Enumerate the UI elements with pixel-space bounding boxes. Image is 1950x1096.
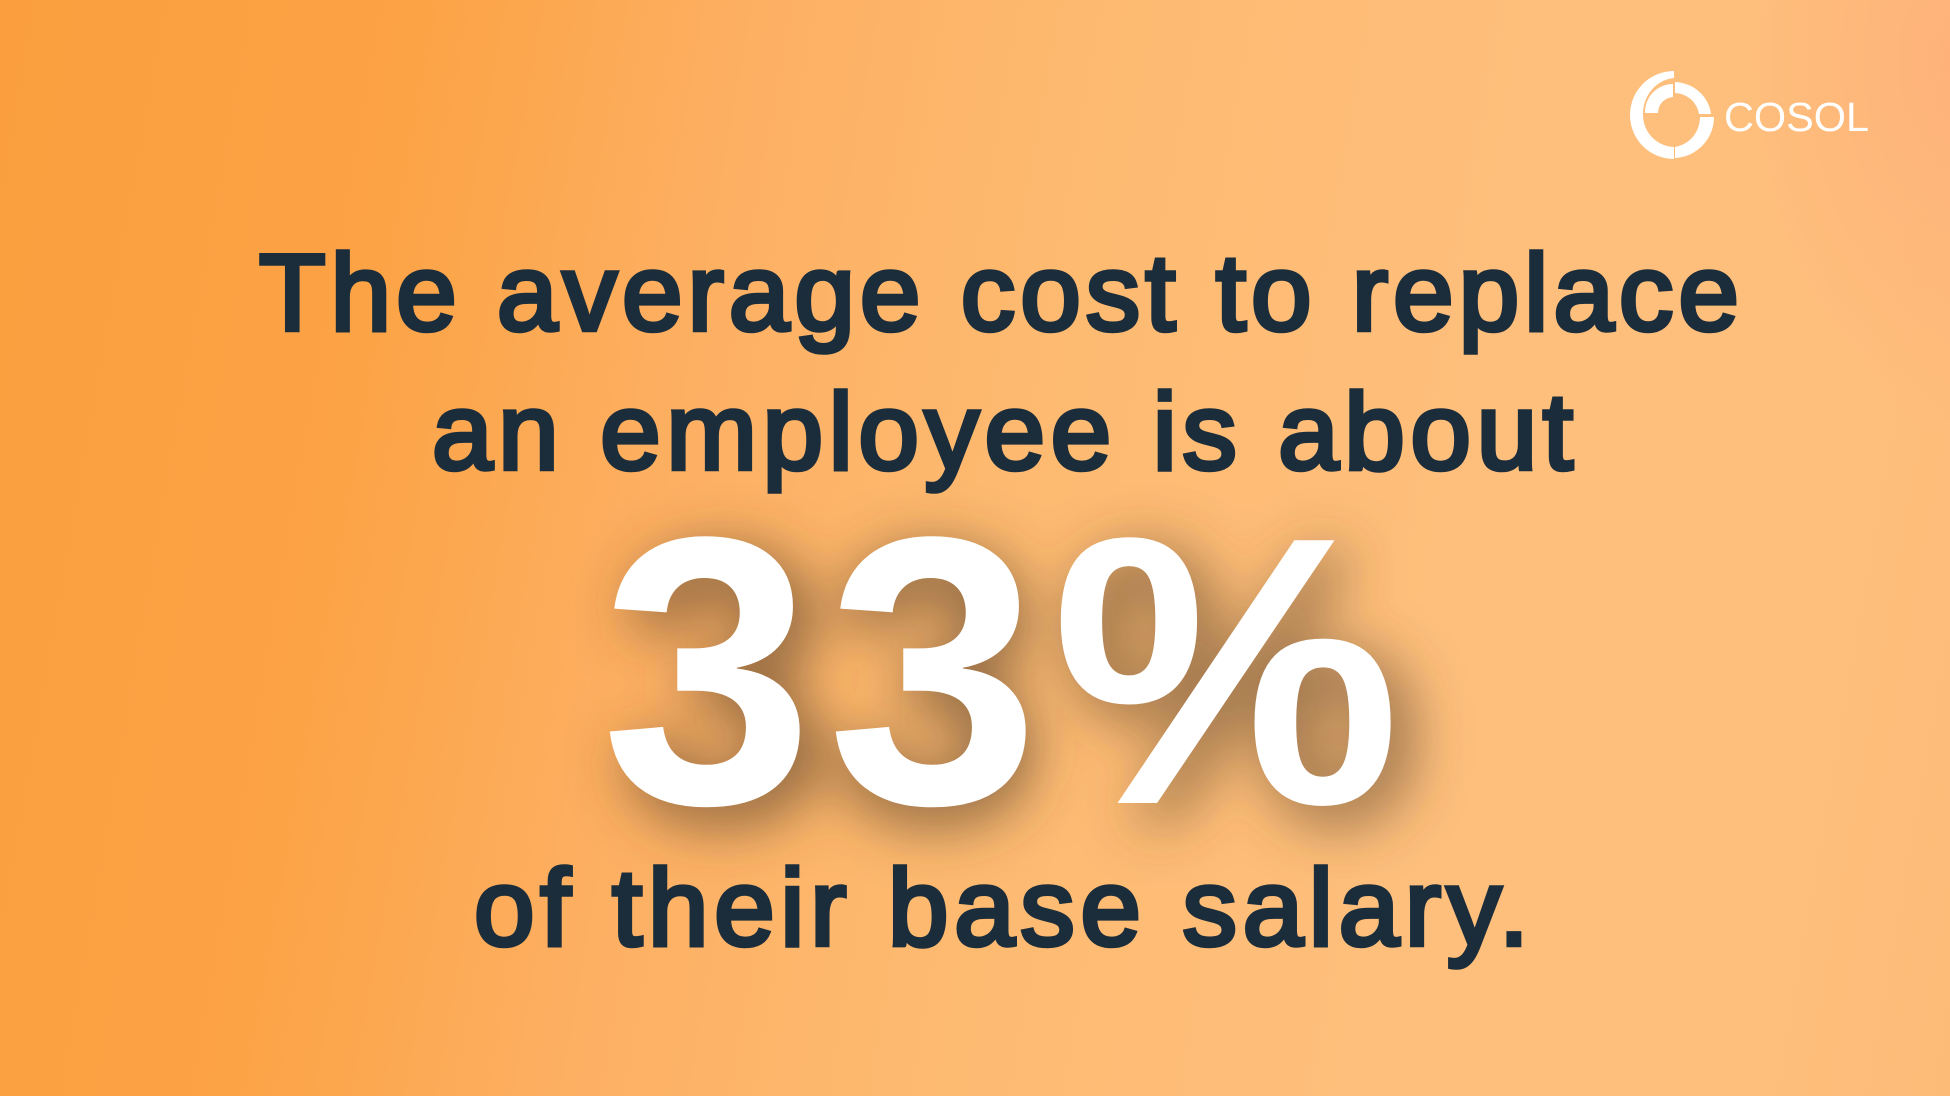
logo: COSOL: [1630, 71, 1869, 159]
statistic shadow: 33: [617, 472, 1042, 899]
statistic: 33%: 3: [601, 457, 813, 884]
statistic: 33%: %: [1051, 457, 1401, 884]
statistic shadow: [617, 472, 1417, 899]
heading: line two: an employee is about: [432, 371, 1573, 493]
logo wordmark: COSOL: [1724, 94, 1869, 140]
statistic: 33%: 3: [827, 457, 1039, 884]
closing text: of their base salary.: [474, 847, 1529, 969]
statistic: 33%: [601, 457, 1401, 884]
heading: line one: The average cost to replace: [259, 232, 1739, 354]
statistic shadow: %: [1067, 472, 1417, 899]
icon: logo ring: [1630, 71, 1714, 159]
